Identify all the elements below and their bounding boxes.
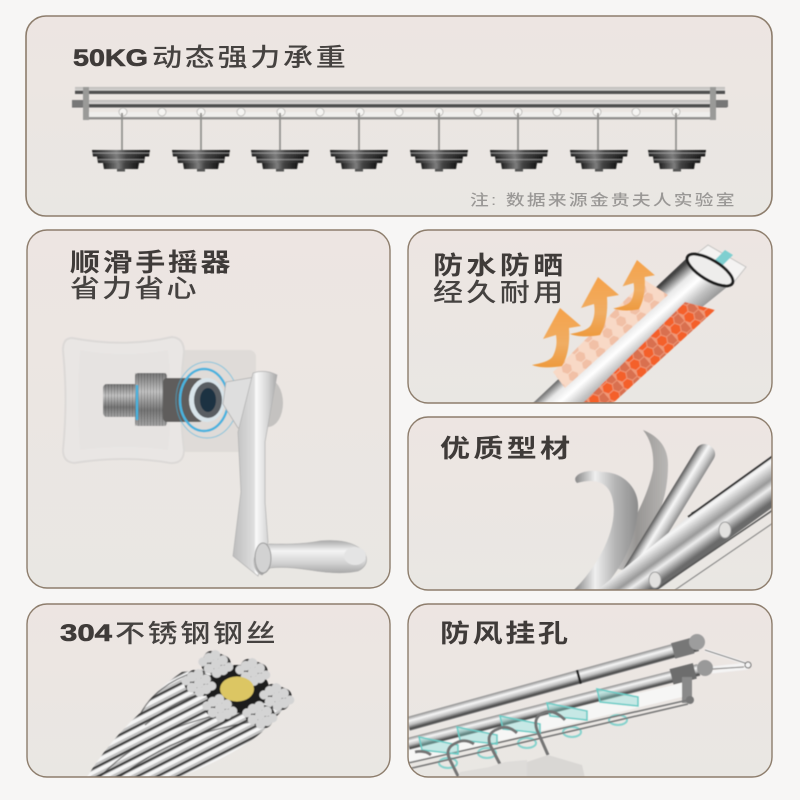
heading: 50KG load: 50KG <box>73 45 148 72</box>
heading: smooth crank: 顺滑手摇器 <box>70 248 233 276</box>
heading: quality profile: 优质型材 <box>440 434 573 462</box>
heading: 304 stainless: 不锈钢钢丝 <box>115 619 278 647</box>
subheading: durable: 经久耐用 <box>433 278 566 306</box>
hanging weights <box>92 113 706 172</box>
icon: steel wire rope <box>87 645 298 777</box>
heading: 304 stainless: 304 <box>60 620 113 647</box>
heading: waterproof: 防水防晒 <box>433 251 566 279</box>
panel: quality profile <box>408 417 773 592</box>
heading: 50KG load <box>73 43 349 72</box>
drying rack rails <box>72 87 728 120</box>
panel: 50KG load bearing <box>26 16 772 216</box>
heading: 50KG load: 动态强力承重 <box>152 43 349 71</box>
tube with hex coating <box>532 245 746 404</box>
source note: 注: 数据来源金贵夫人实验室 <box>470 191 737 209</box>
panel: 304 stainless steel wire <box>27 604 390 777</box>
metal profile strips <box>572 430 773 592</box>
subheading: saves effort: 省力省心 <box>70 274 199 302</box>
heading: windproof holes: 防风挂孔 <box>440 619 571 647</box>
drying rack with hooks <box>406 634 751 778</box>
icon: heat arrows <box>532 260 655 367</box>
panel: waterproof and sunproof <box>408 230 772 404</box>
panel: windproof hanging holes <box>406 604 772 778</box>
panel: smooth hand crank <box>27 230 390 588</box>
icon: crank mechanism <box>63 337 366 576</box>
